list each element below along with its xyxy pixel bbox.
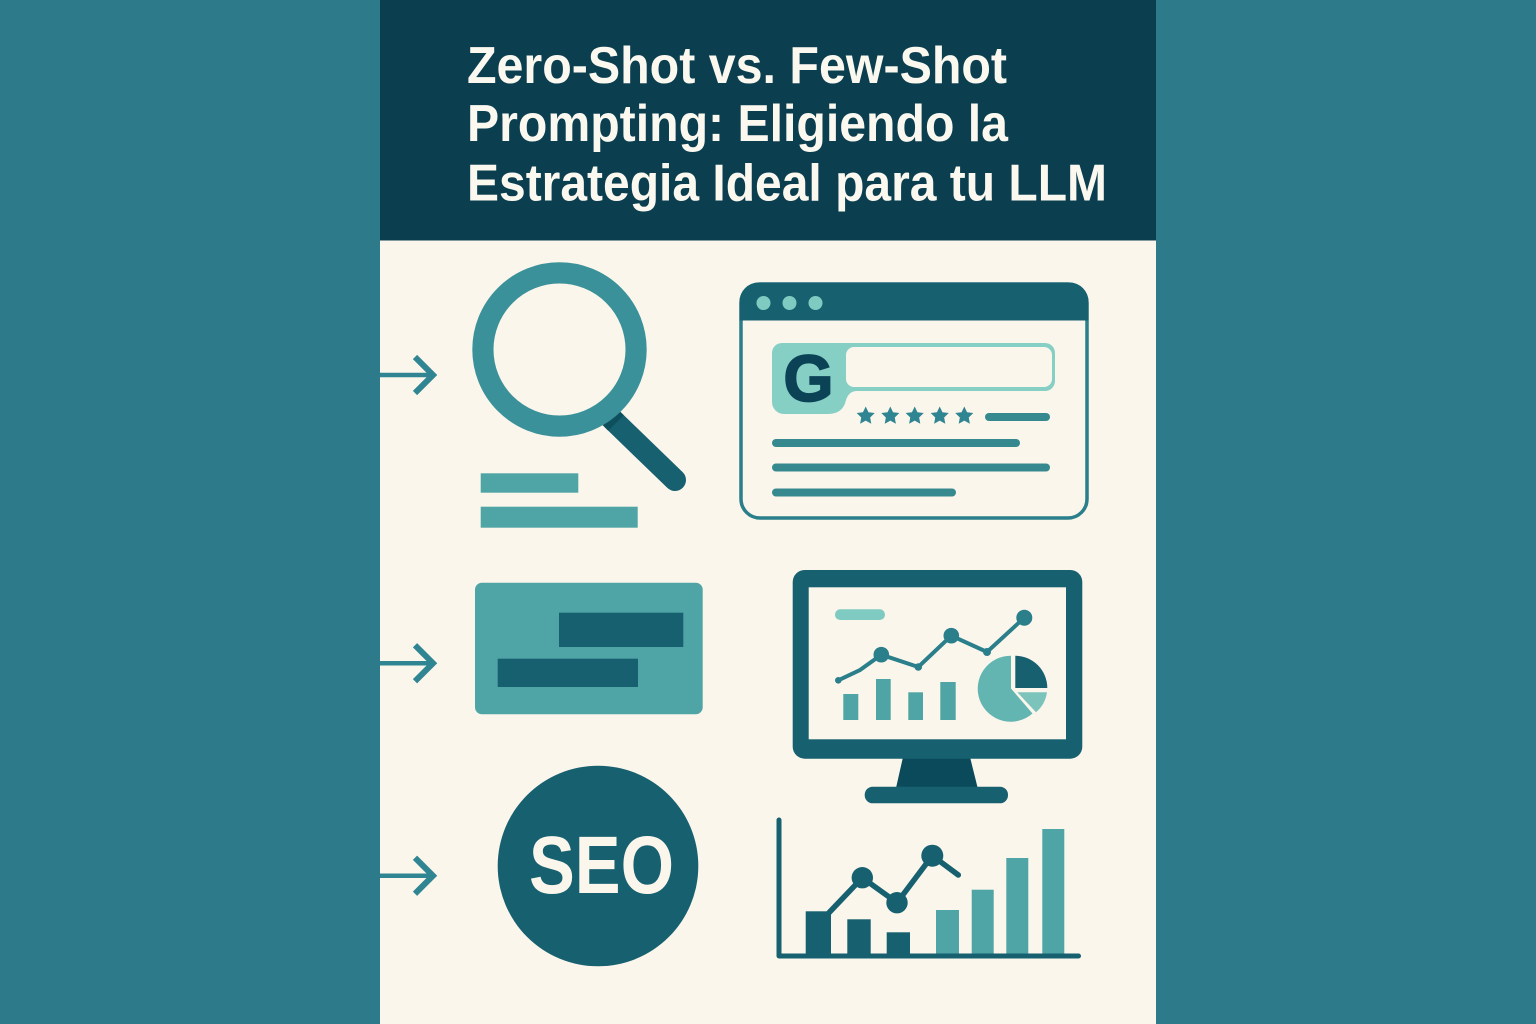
dashboard label pill	[835, 609, 885, 620]
icon: message card with two bars	[475, 583, 703, 714]
dark bars	[806, 911, 910, 955]
monitor base	[865, 787, 1008, 803]
monitor screen	[809, 587, 1066, 739]
arrow: row 2	[380, 645, 433, 681]
browser title bar	[740, 282, 1088, 320]
result text lines	[772, 413, 1050, 496]
title: Prompting: Eligiendo la	[467, 95, 1009, 153]
badge: SEO: SEO	[529, 820, 674, 911]
search bar with G logo tab	[772, 341, 1055, 415]
arrow: row 3	[380, 858, 433, 894]
browser window dots	[756, 296, 822, 310]
icon: magnifying glass	[483, 273, 675, 480]
panel: central card	[380, 0, 1156, 1024]
icon: letter G: G	[784, 341, 834, 415]
arrow: row 1	[380, 357, 433, 393]
chart axes	[779, 820, 1078, 956]
title: Zero-Shot vs. Few-Shot	[467, 37, 1007, 95]
title	[467, 37, 1107, 212]
title: Estrategia Ideal para tu LLM	[467, 154, 1107, 212]
header band with title	[380, 0, 1156, 240]
monitor stand	[896, 757, 978, 788]
star rating	[857, 406, 973, 424]
icon: browser search result window	[740, 282, 1088, 518]
dashboard bar chart	[843, 679, 956, 720]
trend line with markers	[829, 845, 958, 913]
dashboard line chart	[835, 610, 1032, 684]
monitor frame	[793, 570, 1082, 759]
dashboard pie chart	[978, 656, 1047, 722]
badge: SEO	[498, 766, 698, 966]
chart: bars and trend line	[779, 820, 1078, 956]
light teal bars	[936, 829, 1064, 955]
icon: monitor with dashboard	[793, 570, 1082, 803]
text placeholder bars: magnifier	[481, 473, 638, 528]
